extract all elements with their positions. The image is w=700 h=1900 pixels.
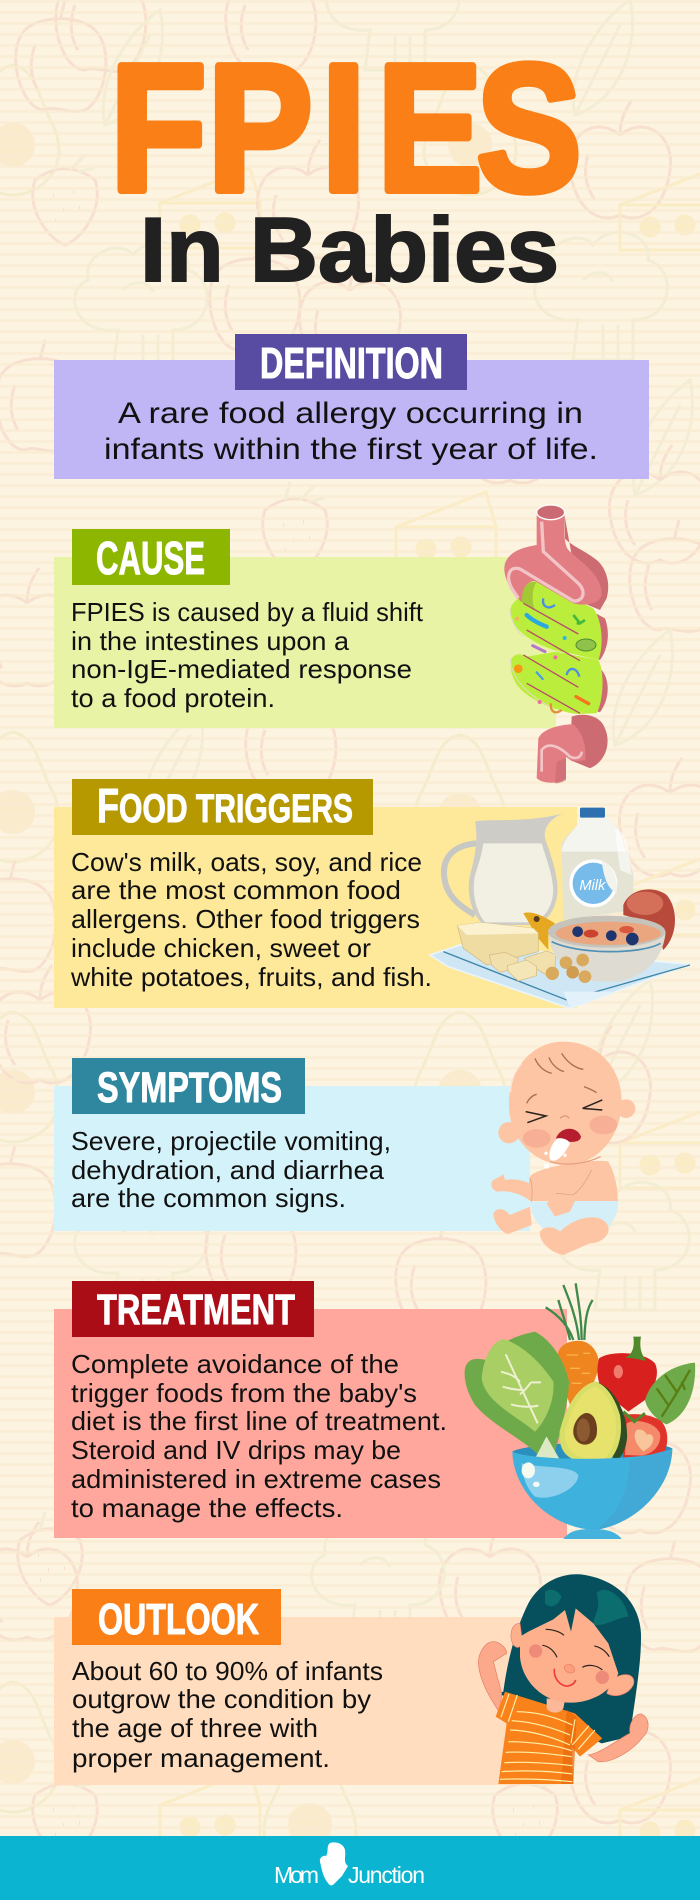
treatment text: diet is the first line of treatment. — [71, 1406, 447, 1436]
outlook text — [72, 1656, 383, 1773]
cause text: to a food protein. — [71, 683, 275, 713]
food triggers text: allergens. Other food triggers — [71, 904, 420, 934]
symptoms text: are the common signs. — [71, 1183, 346, 1213]
title line: FPIES: FPIES — [110, 27, 581, 228]
symptoms text: Severe, projectile vomiting, — [71, 1126, 391, 1156]
cause text: FPIES is caused by a fluid shift — [71, 597, 424, 627]
heading tag: treatment — [72, 1281, 314, 1337]
icon: intestine — [504, 505, 608, 783]
treatment text: Steroid and IV drips may be — [71, 1435, 401, 1465]
outlook text: About 60 to 90% of infants — [72, 1656, 383, 1686]
heading tag: outlook: OUTLOOK — [98, 1595, 259, 1644]
panel: treatment — [54, 1281, 695, 1539]
icon: mother and child — [320, 1842, 348, 1885]
heading tag: outlook — [72, 1589, 281, 1645]
illustration: happy girl — [478, 1574, 648, 1784]
illustration: milk, tofu, oats, soy — [430, 808, 690, 1008]
title line: In Babies: In Babies — [140, 200, 559, 301]
title — [110, 27, 581, 301]
treatment text — [71, 1349, 447, 1523]
heading tag: cause: CAUSE — [96, 532, 205, 584]
heading tag: definition: DEFINITION — [260, 339, 443, 388]
food triggers text: Cow's milk, oats, soy, and rice — [71, 847, 422, 877]
illustration: vegetable bowl — [465, 1283, 695, 1539]
logo: MomJunction — [274, 1842, 425, 1888]
heading tag: treatment: TREATMENT — [97, 1286, 295, 1334]
heading tag: definition — [235, 334, 467, 390]
illustration: milk, tofu, oats, soy: Milk — [579, 878, 606, 894]
cause text — [71, 597, 424, 713]
illustration: baby vomiting — [491, 1042, 635, 1255]
panel: food triggers — [54, 779, 690, 1008]
heading tag: symptoms — [72, 1058, 305, 1114]
symptoms text: dehydration, and diarrhea — [71, 1155, 385, 1185]
treatment text: administered in extreme cases — [71, 1464, 441, 1494]
symptoms text — [71, 1126, 391, 1213]
logo wordmark: Junction — [348, 1862, 425, 1888]
definition text: A rare food allergy occurring in — [118, 397, 583, 430]
treatment text: trigger foods from the baby's — [71, 1378, 417, 1408]
heading tag: cause — [72, 529, 230, 585]
definition text — [104, 397, 598, 466]
outlook text: proper management. — [72, 1743, 330, 1773]
logo wordmark: Mom — [274, 1862, 319, 1888]
outlook text: the age of three with — [72, 1713, 318, 1743]
panel: symptoms — [54, 1042, 635, 1255]
treatment text: to manage the effects. — [71, 1493, 343, 1523]
food triggers text: include chicken, sweet or — [71, 933, 371, 963]
treatment text: Complete avoidance of the — [71, 1349, 399, 1379]
footer bar — [0, 1836, 700, 1900]
heading tag: symptoms: SYMPTOMS — [97, 1064, 282, 1112]
cause text: non-IgE-mediated response — [71, 654, 412, 684]
food triggers text: white potatoes, fruits, and fish. — [70, 962, 432, 992]
cause text: in the intestines upon a — [71, 626, 350, 656]
heading tag: food triggers: FOOD TRIGGERS — [97, 780, 353, 833]
panel: cause — [54, 505, 608, 783]
outlook text: outgrow the condition by — [72, 1684, 371, 1714]
definition text: infants within the first year of life. — [104, 433, 598, 466]
panel: outlook — [54, 1574, 648, 1785]
food triggers text: are the most common food — [71, 875, 401, 905]
food triggers text — [70, 847, 432, 992]
panel: definition — [54, 334, 649, 479]
